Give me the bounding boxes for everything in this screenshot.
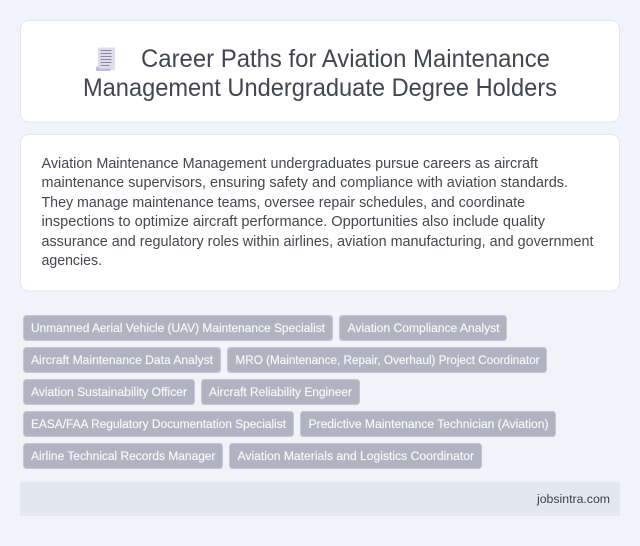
tag: reliability engineer: Aircraft Reliability Engineer bbox=[209, 385, 352, 399]
panel: description bbox=[20, 134, 620, 291]
description text: agencies. bbox=[42, 253, 102, 269]
icon: document scroll bbox=[96, 48, 115, 71]
description text: inspections to optimize aircraft performance. Opportunities also include quality bbox=[42, 214, 546, 230]
tag: documentation specialist: EASA/FAA Regulatory Documentation Specialist bbox=[31, 417, 287, 431]
tag: UAV specialist: Unmanned Aerial Vehicle (UAV) Maintenance Specialist bbox=[31, 321, 326, 335]
tag: data analyst bbox=[24, 348, 220, 372]
tag: UAV specialist bbox=[24, 316, 332, 340]
footer source text: jobsintra.com bbox=[536, 492, 610, 506]
description text: assurance and regulatory roles within airlines, aviation manufacturing, and government bbox=[42, 234, 594, 250]
tag: sustainability officer bbox=[24, 380, 194, 404]
tag: technical records manager bbox=[24, 444, 222, 468]
tag: sustainability officer: Aviation Sustainability Officer bbox=[31, 385, 187, 399]
tag: MRO coordinator bbox=[228, 348, 546, 372]
tag: documentation specialist bbox=[24, 412, 294, 436]
title text: Management Undergraduate Degree Holders bbox=[83, 74, 557, 102]
description text: Aviation Maintenance Management undergraduates pursue careers as aircraft bbox=[42, 156, 538, 172]
footer bar bbox=[20, 482, 620, 516]
career path tags bbox=[24, 316, 556, 468]
tag: predictive maintenance technician: Predictive Maintenance Technician (Aviation) bbox=[308, 417, 548, 431]
tag: logistics coordinator bbox=[230, 444, 482, 468]
tag: data analyst: Aircraft Maintenance Data Analyst bbox=[31, 353, 214, 367]
tag: MRO coordinator: MRO (Maintenance, Repair, Overhaul) Project Coordinator bbox=[236, 353, 540, 367]
tag: compliance analyst bbox=[340, 316, 506, 340]
description text: maintenance supervisors, ensuring safety and compliance with aviation standards. bbox=[42, 175, 568, 191]
title text: Career Paths for Aviation Maintenance bbox=[141, 45, 550, 73]
tag: logistics coordinator: Aviation Materials and Logistics Coordinator bbox=[238, 449, 474, 463]
title text bbox=[83, 45, 557, 102]
tag: compliance analyst: Aviation Compliance Analyst bbox=[348, 321, 500, 335]
description text: They manage maintenance teams, oversee repair schedules, and coordinate bbox=[42, 195, 525, 211]
description text bbox=[42, 156, 594, 269]
panel: title header bbox=[20, 20, 620, 122]
tag: reliability engineer bbox=[202, 380, 360, 404]
tag: predictive maintenance technician bbox=[300, 412, 556, 436]
tag: technical records manager: Airline Technical Records Manager bbox=[31, 449, 216, 463]
